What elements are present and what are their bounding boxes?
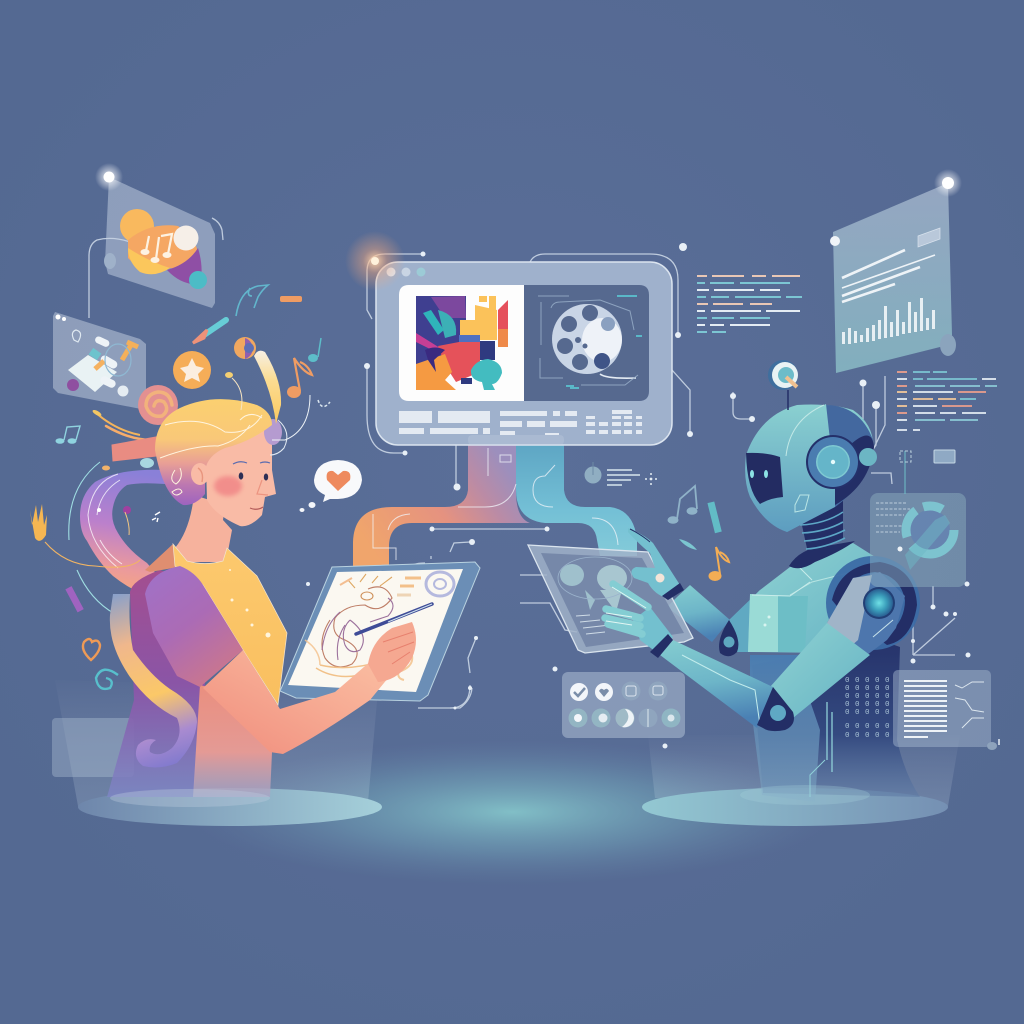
binary column: 0 xyxy=(885,709,890,717)
abstract painting xyxy=(416,296,508,390)
window dots xyxy=(386,268,426,276)
circuit lines xyxy=(89,218,955,708)
star badge xyxy=(173,351,211,389)
robot lower torso back xyxy=(752,640,920,797)
sleeve xyxy=(145,566,243,687)
binary column: 0 xyxy=(845,677,850,685)
palette ball xyxy=(234,337,256,359)
binary column: 0 xyxy=(865,693,870,701)
binary column: 0 xyxy=(855,685,860,693)
purple bun xyxy=(264,419,287,455)
robot near hand xyxy=(605,584,673,658)
robot tablet xyxy=(528,545,693,653)
robot near upper arm xyxy=(770,623,870,718)
robot elbow xyxy=(757,687,794,731)
teal data ribbon xyxy=(516,445,637,556)
orange heart xyxy=(83,639,100,660)
binary column: 0 xyxy=(855,723,860,731)
binary column: 0 xyxy=(875,685,880,693)
monitor base tab xyxy=(468,435,564,445)
teal bar xyxy=(707,501,722,533)
music card xyxy=(95,163,215,308)
left spotlight cone xyxy=(55,680,378,806)
binary column: 0 xyxy=(885,732,890,740)
robot lower torso front xyxy=(750,655,828,802)
donut panel xyxy=(870,451,966,587)
robot base overlay xyxy=(740,785,870,805)
circuit dots xyxy=(306,243,970,748)
body back xyxy=(107,570,205,797)
binary column: 0 xyxy=(875,701,880,709)
orange note xyxy=(287,358,312,398)
binary column: 0 xyxy=(855,701,860,709)
person base overlay xyxy=(110,789,270,807)
binary column: 0 xyxy=(865,723,870,731)
binary column: 0 xyxy=(885,693,890,701)
binary column: 0 xyxy=(865,701,870,709)
robot far hand xyxy=(628,528,684,600)
left translucent card xyxy=(52,718,134,777)
binary column: 0 xyxy=(875,677,880,685)
person tablet xyxy=(280,562,480,701)
binary column: 0 xyxy=(845,685,850,693)
small smile xyxy=(318,400,330,407)
hair ribbon xyxy=(69,462,170,614)
stylus xyxy=(356,604,432,634)
robot far forearm xyxy=(667,585,730,642)
binary column: 0 xyxy=(885,701,890,709)
binary column: 0 xyxy=(845,732,850,740)
binary column: 0 xyxy=(865,685,870,693)
collar xyxy=(789,541,855,568)
binary column: 0 xyxy=(875,732,880,740)
robot torso traces xyxy=(810,702,832,797)
eyes xyxy=(239,472,268,480)
person hand xyxy=(356,604,432,682)
bar chart xyxy=(842,298,935,344)
ear unit xyxy=(806,435,860,489)
binary column: 0 xyxy=(845,723,850,731)
binary column: 0 xyxy=(875,709,880,717)
curl xyxy=(254,351,281,424)
binary column: 0 xyxy=(865,677,870,685)
shirt sparkles xyxy=(229,569,270,638)
hair strands xyxy=(160,414,262,495)
binary column xyxy=(845,677,890,740)
robot antenna xyxy=(768,360,798,410)
chart text lines xyxy=(842,250,935,302)
robot head xyxy=(745,404,877,532)
monitor xyxy=(376,262,672,445)
sketch card xyxy=(53,312,146,409)
code lines top xyxy=(697,276,802,332)
orange note xyxy=(708,547,729,581)
film reel xyxy=(538,295,642,389)
monitor frame xyxy=(376,262,672,445)
orange dash xyxy=(280,296,302,302)
yellow shirt xyxy=(173,544,287,705)
curly hair swirl xyxy=(106,385,178,461)
shoulder accent xyxy=(145,544,190,572)
teal leaf xyxy=(679,539,697,550)
binary column: 0 xyxy=(855,693,860,701)
left platform xyxy=(78,788,382,826)
fire brush xyxy=(30,504,140,567)
code lines right xyxy=(897,372,997,430)
body ribbon xyxy=(110,594,197,767)
small status block xyxy=(584,462,657,485)
robot near shoulder xyxy=(826,556,920,658)
binary column: 0 xyxy=(885,677,890,685)
teal note xyxy=(308,338,321,362)
robot music floaters xyxy=(668,486,729,581)
hair xyxy=(155,399,272,505)
cheek xyxy=(214,476,242,496)
swirl xyxy=(96,670,118,689)
robot forearm xyxy=(660,640,773,728)
binary column: 0 xyxy=(885,685,890,693)
purple bar xyxy=(65,586,84,612)
small accents xyxy=(92,372,310,535)
artwork canvas xyxy=(399,285,524,401)
robot chest xyxy=(748,541,880,653)
right list panel xyxy=(893,670,999,750)
orange light flare xyxy=(345,231,405,291)
binary column: 0 xyxy=(875,723,880,731)
binary column: 0 xyxy=(855,677,860,685)
creative floaters xyxy=(30,285,330,689)
floor glow xyxy=(192,740,832,884)
ribbon details xyxy=(373,448,618,560)
paint brush xyxy=(193,320,226,343)
binary column: 0 xyxy=(845,709,850,717)
binary column: 0 xyxy=(885,723,890,731)
blue note xyxy=(56,426,80,444)
grey note xyxy=(668,486,698,524)
orange data ribbon xyxy=(353,445,530,566)
icon panel xyxy=(562,672,685,738)
small outlined rect xyxy=(934,450,955,463)
right platform xyxy=(642,788,948,826)
rabbit sketch xyxy=(305,574,412,680)
robot far upper arm xyxy=(729,590,760,652)
binary column: 0 xyxy=(855,732,860,740)
visor xyxy=(746,453,783,504)
monitor controls xyxy=(399,410,642,435)
binary column: 0 xyxy=(845,693,850,701)
robot neck xyxy=(798,497,845,553)
binary column: 0 xyxy=(855,709,860,717)
speech bubble xyxy=(300,460,362,512)
outline note xyxy=(236,285,268,316)
binary column: 0 xyxy=(875,693,880,701)
right spotlight cone xyxy=(648,735,960,806)
world map xyxy=(560,564,627,612)
head xyxy=(155,351,287,526)
binary column: 0 xyxy=(845,701,850,709)
binary column: 0 xyxy=(865,732,870,740)
lower shirt xyxy=(193,685,278,797)
film panel xyxy=(524,285,649,401)
chart card xyxy=(830,169,962,373)
neck xyxy=(175,495,232,562)
far elbow joint xyxy=(719,620,738,656)
person arm xyxy=(203,650,393,754)
binary column: 0 xyxy=(865,709,870,717)
